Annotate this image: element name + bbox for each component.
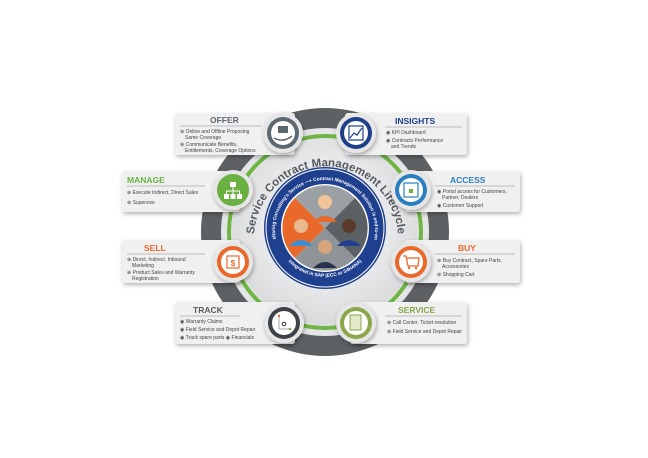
card: OFFER: ⊕ Communicate Benefits, (180, 142, 237, 148)
card: OFFER: Same Coverage (185, 135, 221, 141)
card: TRACK: TRACK (193, 305, 224, 315)
card: MANAGE: ⊕ Supervise (127, 200, 155, 206)
people pie (282, 185, 368, 271)
card: MANAGE: MANAGE (127, 175, 165, 185)
card: BUY: ⊕ Shopping Cart (437, 272, 475, 278)
icon: buy (391, 242, 431, 282)
card: BUY: ⊕ Buy Contract, Spare Parts, (437, 258, 502, 264)
card: ACCESS: ◉ Customer Support (437, 203, 484, 209)
blue center disc: integrated in SAP (ECC or S4HANA) (288, 259, 362, 278)
card: MANAGE (122, 171, 240, 212)
card: BUY (405, 240, 520, 283)
card: SERVICE (350, 302, 467, 344)
card: OFFER: Entitlements, Coverage Options (185, 148, 256, 154)
card: SELL: ⊕ Product Sales and Warranty (127, 270, 195, 276)
card: SERVICE: ⊕ Field Service and Depot Repair (387, 329, 462, 335)
card: ACCESS: ◉ Portal access for Customers, (437, 189, 507, 195)
icon: access (391, 170, 431, 210)
card: SERVICE: SERVICE (398, 305, 435, 315)
title arc text: Service Contract Management Lifecycle (246, 158, 406, 234)
card: ACCESS: Partner, Dealers (442, 195, 479, 201)
card: ACCESS (405, 171, 520, 212)
outer ring (201, 108, 449, 356)
card: TRACK: ◉ Track spare parts ◉ Financials (180, 335, 255, 341)
card: SERVICE: ⊕ Call Center, Ticket resolution (387, 320, 456, 326)
card: SELL: SELL (144, 243, 166, 253)
card: ACCESS: ACCESS (450, 175, 486, 185)
card: TRACK (175, 302, 295, 344)
icon: sell: $ (231, 259, 236, 268)
card: INSIGHTS (345, 113, 467, 155)
blue center disc: Deltaring Consulting's Service ⟶ Contract Management Solution is end-to-end (272, 177, 378, 240)
icon: offer (263, 113, 303, 153)
card: TRACK: ◉ Warranty Claims (180, 319, 223, 325)
icon: manage (213, 170, 253, 210)
card: BUY: BUY (458, 243, 476, 253)
card: INSIGHTS: ◉ KPI Dashboard (386, 130, 426, 136)
card: BUY: Accessories (442, 264, 469, 270)
icon: track (264, 303, 304, 343)
card: SELL: Registration (132, 276, 159, 282)
card: SELL: ⊕ Direct, Indirect, Inbound (127, 257, 186, 263)
card: INSIGHTS: INSIGHTS (395, 116, 435, 126)
card: MANAGE: ⊕ Execute Indirect, Direct Sales (127, 190, 199, 196)
icon: insights (336, 113, 376, 153)
blue center disc (264, 167, 386, 289)
card: OFFER: OFFER (210, 115, 239, 125)
card: TRACK: ◉ Field Service and Depot Repair (180, 327, 256, 333)
card: INSIGHTS: and Trends (391, 144, 417, 150)
card: INSIGHTS: ◉ Contracts Performance (386, 138, 443, 144)
icon: sell (213, 242, 253, 282)
icon: service (336, 303, 376, 343)
card: OFFER: ⊕ Online and Offline Proposing (180, 129, 250, 135)
card: SELL (122, 240, 240, 283)
card: OFFER (175, 113, 295, 155)
card: SELL: Marketing (132, 263, 154, 269)
